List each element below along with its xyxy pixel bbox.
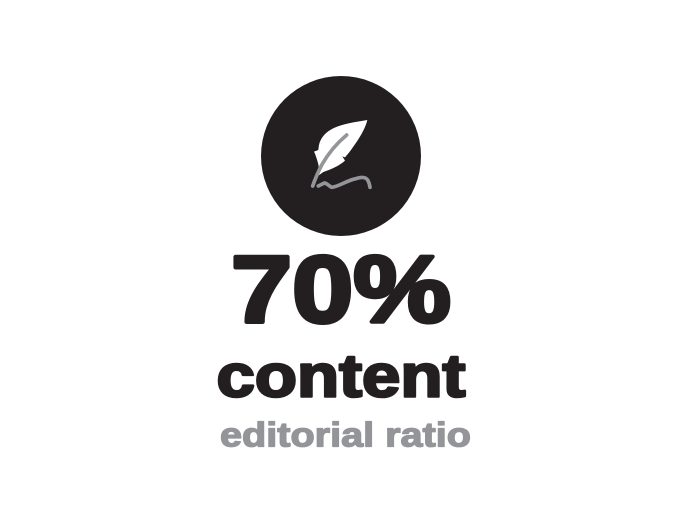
icon: feather quill in dark circle (261, 76, 421, 236)
feather (314, 120, 367, 180)
icon: quill (313, 120, 370, 187)
icon background circle (261, 76, 421, 236)
label: content: content (216, 342, 466, 410)
percentage figure: 70% (231, 237, 451, 343)
ink squiggle (318, 177, 370, 187)
sublabel: editorial ratio: editorial ratio (220, 416, 471, 454)
quill stem (313, 135, 347, 186)
